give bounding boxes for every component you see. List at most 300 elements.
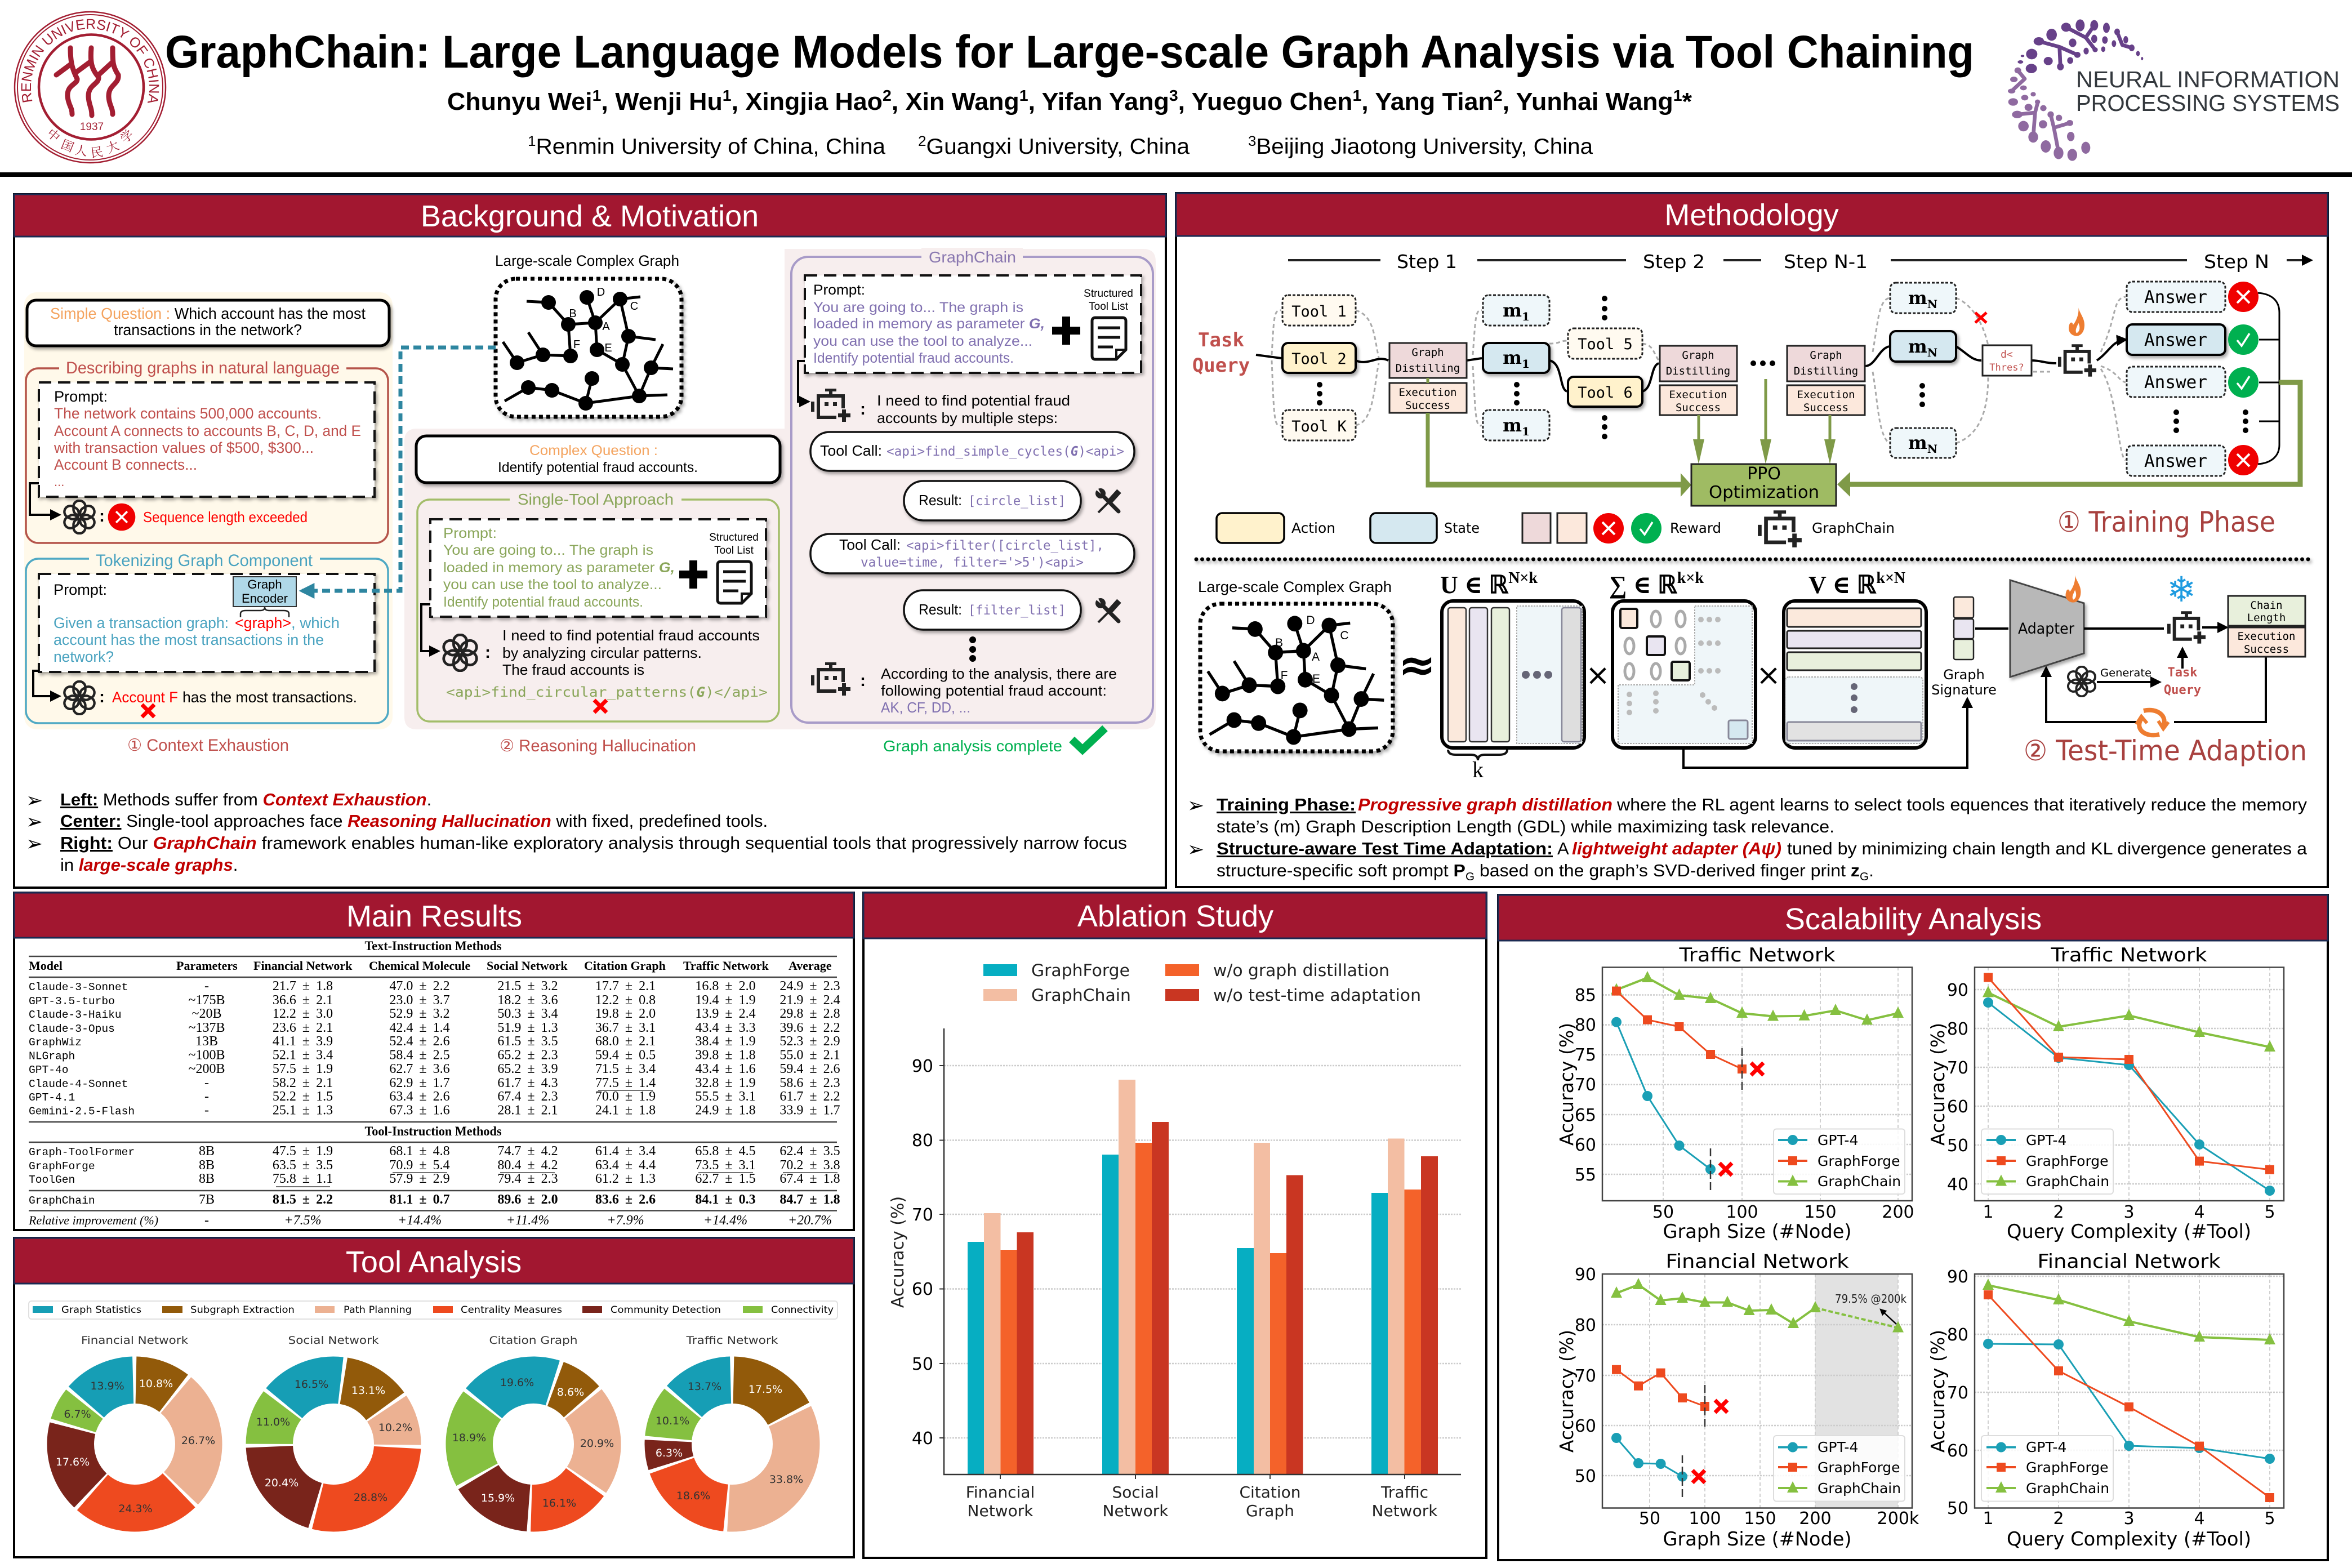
authors: 2 (883, 87, 892, 104)
logo: NeurIPS (2008, 19, 2340, 161)
results table: 79.4 ± 2.3 (497, 1171, 558, 1186)
line chart: traffic, graph size: 75 (1575, 1045, 1596, 1065)
panel: Scalability Analysis (1498, 895, 2328, 1560)
wires (1256, 297, 2126, 460)
panel: Methodology (1176, 193, 2328, 887)
results table: 65.2 ± 2.3 (497, 1048, 558, 1062)
matrix Sigma (1609, 569, 1756, 748)
single-tool approach box: Single-Tool Approach (518, 491, 674, 508)
results table: 63.4 ± 4.4 (595, 1158, 656, 1173)
large-scale graph: F (573, 338, 580, 351)
tokenizing box: Given a transaction graph: (54, 614, 229, 631)
single-tool approach box: Identify potential fraud accounts. (443, 594, 643, 610)
adapter (2010, 575, 2084, 677)
results table: 16.8 ± 2.0 (695, 979, 756, 994)
line chart: financial, graph size: 200 (1799, 1509, 1832, 1529)
bar chart: Traffic (1380, 1483, 1428, 1502)
donut: Social Network: Social Network (288, 1334, 378, 1347)
state column 1: 1 (1522, 310, 1530, 323)
logo: Renmin University seal (14, 11, 167, 163)
results table: 42.4 ± 1.4 (389, 1021, 450, 1035)
authors: , Yifan Yang (1028, 88, 1169, 115)
large-scale graph, lower: Large-scale Complex Graph (1198, 578, 1392, 595)
state column N: N (1927, 297, 1937, 311)
icon: snowflake: ❄ (2167, 569, 2196, 610)
line chart: traffic, query complexity: GraphChain (2026, 1173, 2109, 1190)
results table: GraphChain (29, 1195, 95, 1207)
results table: Claude-3-Sonnet (29, 981, 128, 994)
results table: 21.5 ± 3.2 (497, 979, 558, 994)
line chart: financial, graph size: Financial Network (1666, 1250, 1849, 1273)
results table: 65.8 ± 4.5 (695, 1144, 756, 1159)
results table: 32.8 ± 1.9 (695, 1076, 756, 1090)
captions: ① Context Exhaustion (127, 736, 289, 755)
line chart: financial, query complexity: 4 (2194, 1509, 2205, 1529)
line chart: traffic, graph size: 150 (1804, 1202, 1837, 1222)
methodology text: Progressive graph distillation (1358, 795, 1612, 814)
chart legend: GraphChain (1031, 986, 1131, 1005)
task query label: Task (1198, 329, 1244, 351)
results table: 17.7 ± 2.1 (595, 979, 656, 994)
line chart: financial, query complexity: 3 (2123, 1509, 2135, 1529)
bar chart: Financial (966, 1483, 1035, 1502)
results table: 61.4 ± 3.4 (595, 1144, 656, 1159)
line chart: financial, graph size (1556, 1250, 1919, 1551)
bar chart: 90 (912, 1057, 933, 1076)
line chart: traffic, graph size: Graph Size (#Node) (1663, 1220, 1852, 1243)
reward step 1 (1389, 343, 1467, 413)
reward step 2: Distilling (1666, 365, 1730, 377)
panel: Tool Analysis (14, 1238, 854, 1557)
adapter: Adapter (2018, 620, 2075, 638)
bar chart: 60 (912, 1280, 933, 1299)
results table: 38.4 ± 1.9 (695, 1034, 756, 1049)
single-tool approach box: you can use the tool to analyze... (443, 577, 662, 593)
threshold check: d< (2001, 349, 2013, 360)
tool column 2: Tool 6 (1578, 384, 1633, 402)
reward boxes: Length (2247, 612, 2286, 624)
donut: Traffic Network: Traffic Network (685, 1334, 778, 1347)
graph signature: Graph (1943, 667, 1985, 683)
results table: 59.4 ± 0.5 (595, 1048, 656, 1062)
affiliations: Beijing Jiaotong University, China (1256, 135, 1593, 159)
generate: Task (2168, 666, 2197, 680)
line chart: traffic, graph size: 55 (1575, 1165, 1596, 1185)
donut: Traffic Network: 33.8% (769, 1473, 803, 1486)
state column 1: m (1503, 347, 1522, 368)
line chart: traffic, graph size: GPT-4 (1818, 1132, 1858, 1148)
graphchain box: you can use the tool to analyze... (813, 333, 1032, 349)
natural language box: Sequence length exceeded (143, 509, 308, 525)
authors: 2 (1494, 87, 1503, 104)
reasoning hallucination column background (404, 249, 1156, 729)
natural language box: Account B connects... (54, 456, 197, 473)
results table: 13.9 ± 2.4 (695, 1006, 756, 1021)
line chart: financial, graph size: 90 (1575, 1265, 1596, 1285)
legend: State (1444, 520, 1480, 536)
reward step 1: Distilling (1396, 362, 1460, 375)
single-tool approach box: Structured (709, 532, 759, 544)
line chart: traffic, query complexity: Query Complexity (#Tool) (2007, 1220, 2251, 1243)
results table: 65.2 ± 3.9 (497, 1062, 558, 1076)
results table: Gemini-2.5-Flash (29, 1105, 135, 1117)
line chart: traffic, query complexity (1927, 944, 2284, 1243)
tokenizing box: , which (291, 614, 340, 631)
donut: Citation Graph: 15.9% (481, 1492, 515, 1504)
line chart: financial, query complexity: GPT-4 (2026, 1439, 2066, 1455)
results table: GraphForge (29, 1160, 95, 1173)
single-tool approach box: : (485, 643, 491, 662)
bar chart (888, 1028, 1461, 1520)
complex question: Complex Question : (529, 443, 658, 458)
takeaway text: ➢ (26, 789, 43, 812)
approx symbol: ≈ (1398, 639, 1436, 691)
line chart: traffic, query complexity: 5 (2264, 1202, 2275, 1222)
reward step N-1: Distilling (1794, 365, 1858, 377)
authors: Chunyu Wei (447, 88, 590, 115)
line chart: traffic, query complexity: Accuracy (%) (1927, 1023, 1949, 1146)
donut: Financial Network: 26.7% (181, 1435, 215, 1447)
state column N (1890, 283, 1956, 458)
adapter flow (1975, 627, 2266, 722)
result 1 (904, 481, 1081, 520)
tokenizing box: has the most transactions. (182, 689, 357, 706)
results table: 19.8 ± 2.0 (595, 1006, 656, 1021)
logo: NeurIPS: PROCESSING SYSTEMS (2076, 90, 2340, 116)
reward step 2: Success (1676, 402, 1721, 414)
donut: Social Network: 28.8% (354, 1491, 387, 1504)
results table: 63.5 ± 3.5 (273, 1158, 333, 1173)
results table: 70.9 ± 5.4 (389, 1158, 450, 1173)
large-scale graph (495, 252, 681, 417)
line chart: traffic, graph size: GraphForge (1818, 1153, 1900, 1169)
tokenizing box: Tokenizing Graph Component (96, 551, 313, 570)
line chart: financial, query complexity: Accuracy (%) (1927, 1330, 1949, 1453)
bar chart: 50 (912, 1355, 933, 1374)
line chart: traffic, query complexity: 4 (2194, 1202, 2205, 1222)
line chart: financial, graph size: 60 (1575, 1416, 1596, 1436)
generate: Query (2164, 683, 2201, 697)
large-scale graph, lower (1198, 578, 1393, 751)
graphchain box: Prompt: (813, 282, 865, 298)
line chart: financial, graph size: GraphForge (1818, 1459, 1900, 1476)
results table: 47.0 ± 2.2 (389, 979, 450, 994)
authors: , Yunhai Wang (1503, 88, 1673, 115)
reward boxes: Success (2244, 643, 2289, 656)
line chart: financial, query complexity: GraphForge (2026, 1459, 2109, 1476)
takeaway text: ➢ (26, 832, 43, 856)
matrix V: V ∈ ℝ (1808, 571, 1876, 599)
state column N: m (1908, 432, 1927, 453)
authors: 1 (1352, 87, 1361, 104)
tool column 2: Tool 5 (1578, 336, 1633, 353)
logo: Renmin University seal: 1937 (80, 121, 104, 133)
authors: 1 (723, 87, 732, 104)
bar chart: Social (1112, 1483, 1159, 1502)
line chart: financial, query complexity: Financial Network (2038, 1250, 2221, 1273)
takeaway text: Left: Methods suffer from Context Exhaustion. (60, 790, 431, 809)
threshold check (1975, 313, 2032, 376)
results table: - (204, 1213, 209, 1228)
panel: Background & Motivation (14, 194, 1166, 888)
training phase label: ① Training Phase (2057, 506, 2275, 538)
reward step N-1 (1787, 346, 1865, 415)
legend: Path Planning (344, 1304, 412, 1316)
graphchain box: GraphChain (929, 248, 1016, 266)
donut: Citation Graph: 20.9% (580, 1437, 614, 1450)
icon: agent (2167, 611, 2206, 644)
results table: 62.4 ± 3.5 (779, 1144, 840, 1159)
affiliations: Guangxi University, China (926, 135, 1190, 159)
captions (127, 728, 1105, 755)
methodology text: Training Phase: (1217, 795, 1356, 814)
authors: 1 (593, 87, 601, 104)
table header row: Parameters (176, 959, 238, 973)
single-tool approach box: Prompt: (443, 525, 497, 541)
reward step N-1: Execution (1797, 389, 1855, 401)
PPO optimization (1428, 379, 2300, 506)
results table: 8B (199, 1171, 215, 1186)
authors: , Wenji Hu (601, 88, 723, 115)
results table: 24.9 ± 1.8 (695, 1103, 756, 1117)
PPO optimization: Optimization (1709, 483, 1819, 502)
graphchain box (791, 248, 1153, 723)
results table: 41.1 ± 3.9 (273, 1034, 333, 1049)
results table: 83.6 ± 2.6 (595, 1192, 656, 1207)
results table: Tool-Instruction Methods (365, 1124, 502, 1138)
line chart: financial, query complexity: GraphChain (2026, 1480, 2109, 1496)
matrix V: k×N (1876, 569, 1905, 587)
results table: 67.4 ± 1.8 (779, 1171, 840, 1186)
methodology text (1187, 794, 2308, 883)
affiliations: 3 (1248, 133, 1256, 149)
large-scale graph, lower: F (1281, 669, 1288, 682)
results table: 39.6 ± 2.2 (779, 1021, 840, 1035)
single-tool approach box: You are going to... The graph is (443, 542, 653, 558)
tool column (1282, 295, 1356, 440)
line chart: traffic, query complexity: 40 (1947, 1175, 1968, 1195)
result 1: Result: (919, 492, 962, 509)
icon: flame (2069, 308, 2084, 336)
matrix V (1784, 569, 1926, 748)
result 2: [filter_list] (968, 603, 1066, 618)
task query label (1192, 329, 1250, 377)
donut: Social Network: 11.0% (256, 1416, 290, 1428)
reward step 1: Execution (1399, 386, 1456, 399)
line chart: financial, graph size: GPT-4 (1818, 1439, 1858, 1455)
line chart: financial, query complexity (1927, 1250, 2284, 1551)
natural language box: : (99, 507, 105, 525)
logo: Renmin University seal: 民 (90, 142, 104, 161)
affiliations: Renmin University of China, China (536, 135, 885, 159)
line chart: financial, query complexity: 80 (1947, 1325, 1968, 1345)
large-scale graph, lower: C (1340, 629, 1349, 642)
reward step 2 (1660, 346, 1737, 415)
results table: 57.9 ± 2.9 (389, 1171, 450, 1186)
bar chart: Accuracy (%) (888, 1196, 908, 1308)
graphchain box: following potential fraud account: (881, 682, 1107, 699)
tokenizing box (26, 551, 388, 723)
methodology text: G (1860, 871, 1869, 883)
donut: Financial Network (56, 1334, 215, 1515)
results table: 73.5 ± 3.1 (695, 1158, 756, 1173)
icon: wrench (1095, 598, 1119, 622)
graphchain box: Identify potential fraud accounts. (813, 350, 1014, 366)
results table: 23.0 ± 3.7 (389, 993, 450, 1008)
state column N: m (1908, 336, 1927, 357)
results table: 12.2 ± 3.0 (273, 1006, 333, 1021)
bar chart: 70 (912, 1205, 933, 1225)
results table: 59.4 ± 2.6 (779, 1062, 840, 1076)
chart legend: GraphForge (1031, 961, 1130, 980)
results table: 28.1 ± 2.1 (497, 1103, 558, 1117)
heading: Ablation Study: Ablation Study (1077, 899, 1273, 933)
results table: - (204, 1089, 209, 1104)
panel: Main Results (14, 893, 854, 1230)
tokenizing box: network? (54, 648, 114, 665)
line chart: traffic, graph size: 70 (1575, 1075, 1596, 1095)
legend: Graph Statistics (61, 1304, 141, 1316)
results table: Claude-3-Haiku (29, 1009, 122, 1021)
donut: Financial Network: 13.9% (90, 1380, 124, 1392)
bar chart: Network (1372, 1502, 1438, 1520)
tool call 2: <api>filter([circle_list], (906, 538, 1104, 553)
graph encoder: Graph (247, 577, 282, 591)
generate: Generate (2100, 667, 2151, 679)
single-tool approach box: <api>find_circular_patterns( G)</api> (446, 684, 768, 700)
line chart: financial, graph size: 100 (1689, 1509, 1721, 1529)
title: GraphChain: Large Language Models for Large-scale Graph Analysis via Tool Chaining (165, 26, 1974, 78)
line chart: traffic, query complexity: Traffic Network (2050, 944, 2207, 966)
donut: Financial Network: 24.3% (118, 1503, 153, 1515)
results table: ~137B (188, 1021, 225, 1035)
heading: Scalability Analysis: Scalability Analysis (1785, 902, 2042, 936)
methodology text: . (1869, 861, 1874, 880)
logo: Renmin University seal: 中 (43, 124, 64, 145)
task query label: Query (1192, 354, 1250, 377)
results table: 68.0 ± 2.1 (595, 1034, 656, 1049)
heading: Tool Analysis: Tool Analysis (346, 1245, 522, 1279)
results table: GPT-4o (29, 1064, 69, 1076)
line chart: traffic, graph size: Traffic Network (1678, 944, 1836, 966)
line chart: traffic, query complexity: 90 (1947, 981, 1968, 1000)
bar chart: 40 (912, 1429, 933, 1449)
reward boxes (2228, 596, 2305, 657)
matrix U (1440, 569, 1584, 782)
authors: , Xin Wang (892, 88, 1019, 115)
state column 1: m (1503, 415, 1522, 436)
line chart: traffic, query complexity: 50 (1947, 1136, 1968, 1156)
legend: Reward (1670, 520, 1721, 536)
line chart: financial, graph size: 79.5% @200k (1835, 1292, 1906, 1306)
state column N: m (1908, 287, 1927, 309)
natural language box: ... (54, 475, 64, 489)
line chart: traffic, query complexity: GPT-4 (2026, 1132, 2066, 1148)
takeaway text (26, 789, 1127, 875)
natural language box: Describing graphs in natural language (66, 359, 340, 377)
chart legend (983, 961, 1421, 1005)
dashed teal connector arrow (302, 348, 496, 591)
reward step 2: Graph (1682, 349, 1714, 362)
results table: 21.7 ± 1.8 (273, 979, 333, 994)
answers (2127, 282, 2279, 476)
donut: Citation Graph: 8.6% (557, 1386, 584, 1398)
tokenizing box: Account F (112, 689, 178, 706)
complex question: Identify potential fraud accounts. (498, 460, 698, 475)
results table: ~100B (188, 1048, 225, 1062)
state column 1: 1 (1522, 357, 1530, 371)
natural language box: The network contains 500,000 accounts. (54, 405, 322, 422)
heading: Main Results: Main Results (346, 899, 522, 933)
takeaway text: ➢ (26, 810, 43, 834)
results table: 23.6 ± 2.1 (273, 1021, 333, 1035)
icon: agent (2058, 344, 2096, 377)
header (0, 11, 2352, 177)
ellipsis (1750, 360, 1775, 366)
methodology text: state’s (m) Graph Description Length (GDL) while maximizing task relevance. (1217, 817, 1834, 836)
line chart: traffic, graph size: 80 (1575, 1015, 1596, 1035)
answers: Answer (2144, 372, 2207, 393)
authors: 1 (1673, 87, 1682, 104)
times: × (1585, 658, 1610, 692)
single-tool approach box (417, 491, 779, 721)
graphchain box: Structured (1084, 288, 1133, 300)
chart legend: w/o graph distillation (1213, 961, 1389, 980)
table header row: Financial Network (253, 959, 353, 973)
results table: - (204, 979, 209, 994)
step timeline: Step N (2204, 251, 2269, 273)
graphchain box: According to the analysis, there are (881, 665, 1117, 682)
results table: 36.6 ± 2.1 (273, 993, 333, 1008)
results table: 61.7 ± 2.2 (779, 1089, 840, 1104)
line chart: financial, query complexity: 50 (1947, 1499, 1968, 1518)
line chart: financial, query complexity: 90 (1947, 1267, 1968, 1287)
results table: ~20B (191, 1006, 222, 1021)
legend: Subgraph Extraction (190, 1304, 295, 1316)
authors: , Yang Tian (1361, 88, 1494, 115)
results table: +20.7% (788, 1213, 832, 1228)
result 1: [circle_list] (968, 494, 1066, 509)
line chart: financial, query complexity: 60 (1947, 1441, 1968, 1461)
results table: 84.7 ± 1.8 (779, 1192, 840, 1207)
tokenizing box: Prompt: (54, 581, 107, 598)
authors: , Yueguo Chen (1178, 88, 1352, 115)
results table: 58.2 ± 2.1 (273, 1076, 333, 1090)
logo: Renmin University seal: RENMIN UNIVERSITY OF CHINA (21, 19, 159, 103)
results table: 61.5 ± 3.5 (497, 1034, 558, 1049)
state column 1 (1483, 295, 1549, 440)
donut: Traffic Network: 6.3% (656, 1447, 683, 1459)
legend: GraphChain (1812, 520, 1895, 536)
legend: Centrality Measures (461, 1304, 562, 1316)
matrix U: N×k (1508, 569, 1538, 587)
line chart: traffic, query complexity: 70 (1947, 1058, 1968, 1078)
reward step N-1: Success (1803, 402, 1848, 414)
results table: 89.6 ± 2.0 (497, 1192, 558, 1207)
results table: 25.1 ± 1.3 (273, 1103, 333, 1117)
legend: Connectivity (771, 1304, 834, 1316)
results table: 18.2 ± 3.6 (497, 993, 558, 1008)
table header row: Chemical Molecule (369, 959, 470, 973)
donut: Traffic Network: 17.5% (749, 1383, 782, 1396)
graphchain box: accounts by multiple steps: (877, 409, 1058, 426)
step timeline (1288, 251, 2311, 273)
legend (1217, 510, 1895, 547)
results table: 57.5 ± 1.9 (273, 1062, 333, 1076)
reward step 2: Execution (1669, 389, 1727, 401)
methodology text: A (1557, 839, 1569, 858)
results table: 50.3 ± 3.4 (497, 1006, 558, 1021)
